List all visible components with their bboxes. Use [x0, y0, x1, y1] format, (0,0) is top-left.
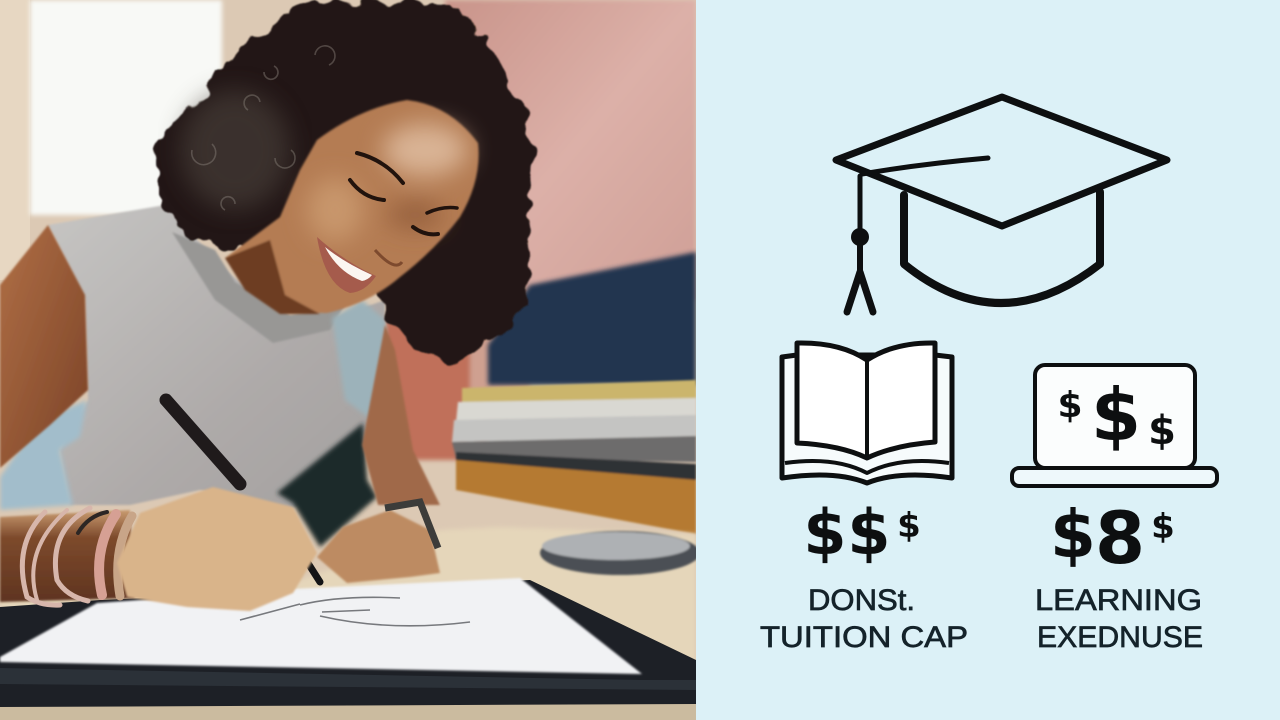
student shirt	[48, 205, 385, 510]
second hand	[317, 510, 440, 583]
forearm	[0, 510, 135, 602]
icon: laptop with dollar signs: $	[1148, 408, 1176, 454]
eyes and brows	[350, 153, 457, 234]
label: learning expense	[1035, 584, 1203, 654]
label: tuition cap: TUITION CAP	[760, 621, 968, 654]
dark shirt shadow	[277, 423, 377, 547]
cost symbols: tuition: $	[803, 496, 847, 569]
cost symbols: learning: $	[1151, 507, 1175, 547]
notebook	[0, 578, 696, 720]
cost symbols: learning: 8	[1095, 496, 1145, 580]
cost symbols: learning	[1050, 496, 1175, 580]
nose shadow	[375, 250, 402, 265]
writing hand	[117, 487, 317, 611]
background wall and window	[0, 0, 696, 720]
face highlights	[307, 124, 467, 242]
shirt shoulder tint and blue cloth	[332, 300, 385, 420]
left arm	[0, 225, 88, 468]
cost symbols: learning: $	[1050, 496, 1096, 573]
cost symbols: tuition: $	[897, 506, 921, 546]
icon: graduation cap	[836, 97, 1167, 312]
bracelets	[22, 508, 132, 605]
watch	[385, 502, 438, 548]
label: tuition cap: DONSt.	[808, 584, 915, 617]
label: tuition cap	[760, 584, 968, 654]
computer mouse	[540, 531, 700, 575]
smile	[317, 237, 376, 293]
brick wall	[385, 0, 696, 460]
cost symbols: tuition: $	[847, 496, 891, 569]
navy wall band	[488, 252, 696, 385]
pen	[166, 400, 320, 582]
icon: laptop with dollar signs: $	[1057, 385, 1083, 426]
right arm	[362, 325, 440, 505]
panel: light blue icon panel	[760, 94, 1219, 654]
icon: open book	[782, 343, 952, 483]
icon: laptop with dollar signs: $	[1091, 373, 1141, 457]
label: learning expense: EXEDNUSE	[1037, 621, 1203, 654]
hair	[155, 0, 532, 363]
label: learning expense: LEARNING	[1035, 584, 1202, 617]
icon: laptop with dollar signs	[1012, 365, 1217, 486]
face and neck	[225, 100, 479, 314]
stack of books	[452, 380, 696, 534]
photo: smiling student writing at a desk	[0, 0, 696, 720]
cost symbols: tuition	[803, 496, 921, 569]
desk surface	[0, 527, 696, 720]
shirt collar	[172, 232, 345, 343]
